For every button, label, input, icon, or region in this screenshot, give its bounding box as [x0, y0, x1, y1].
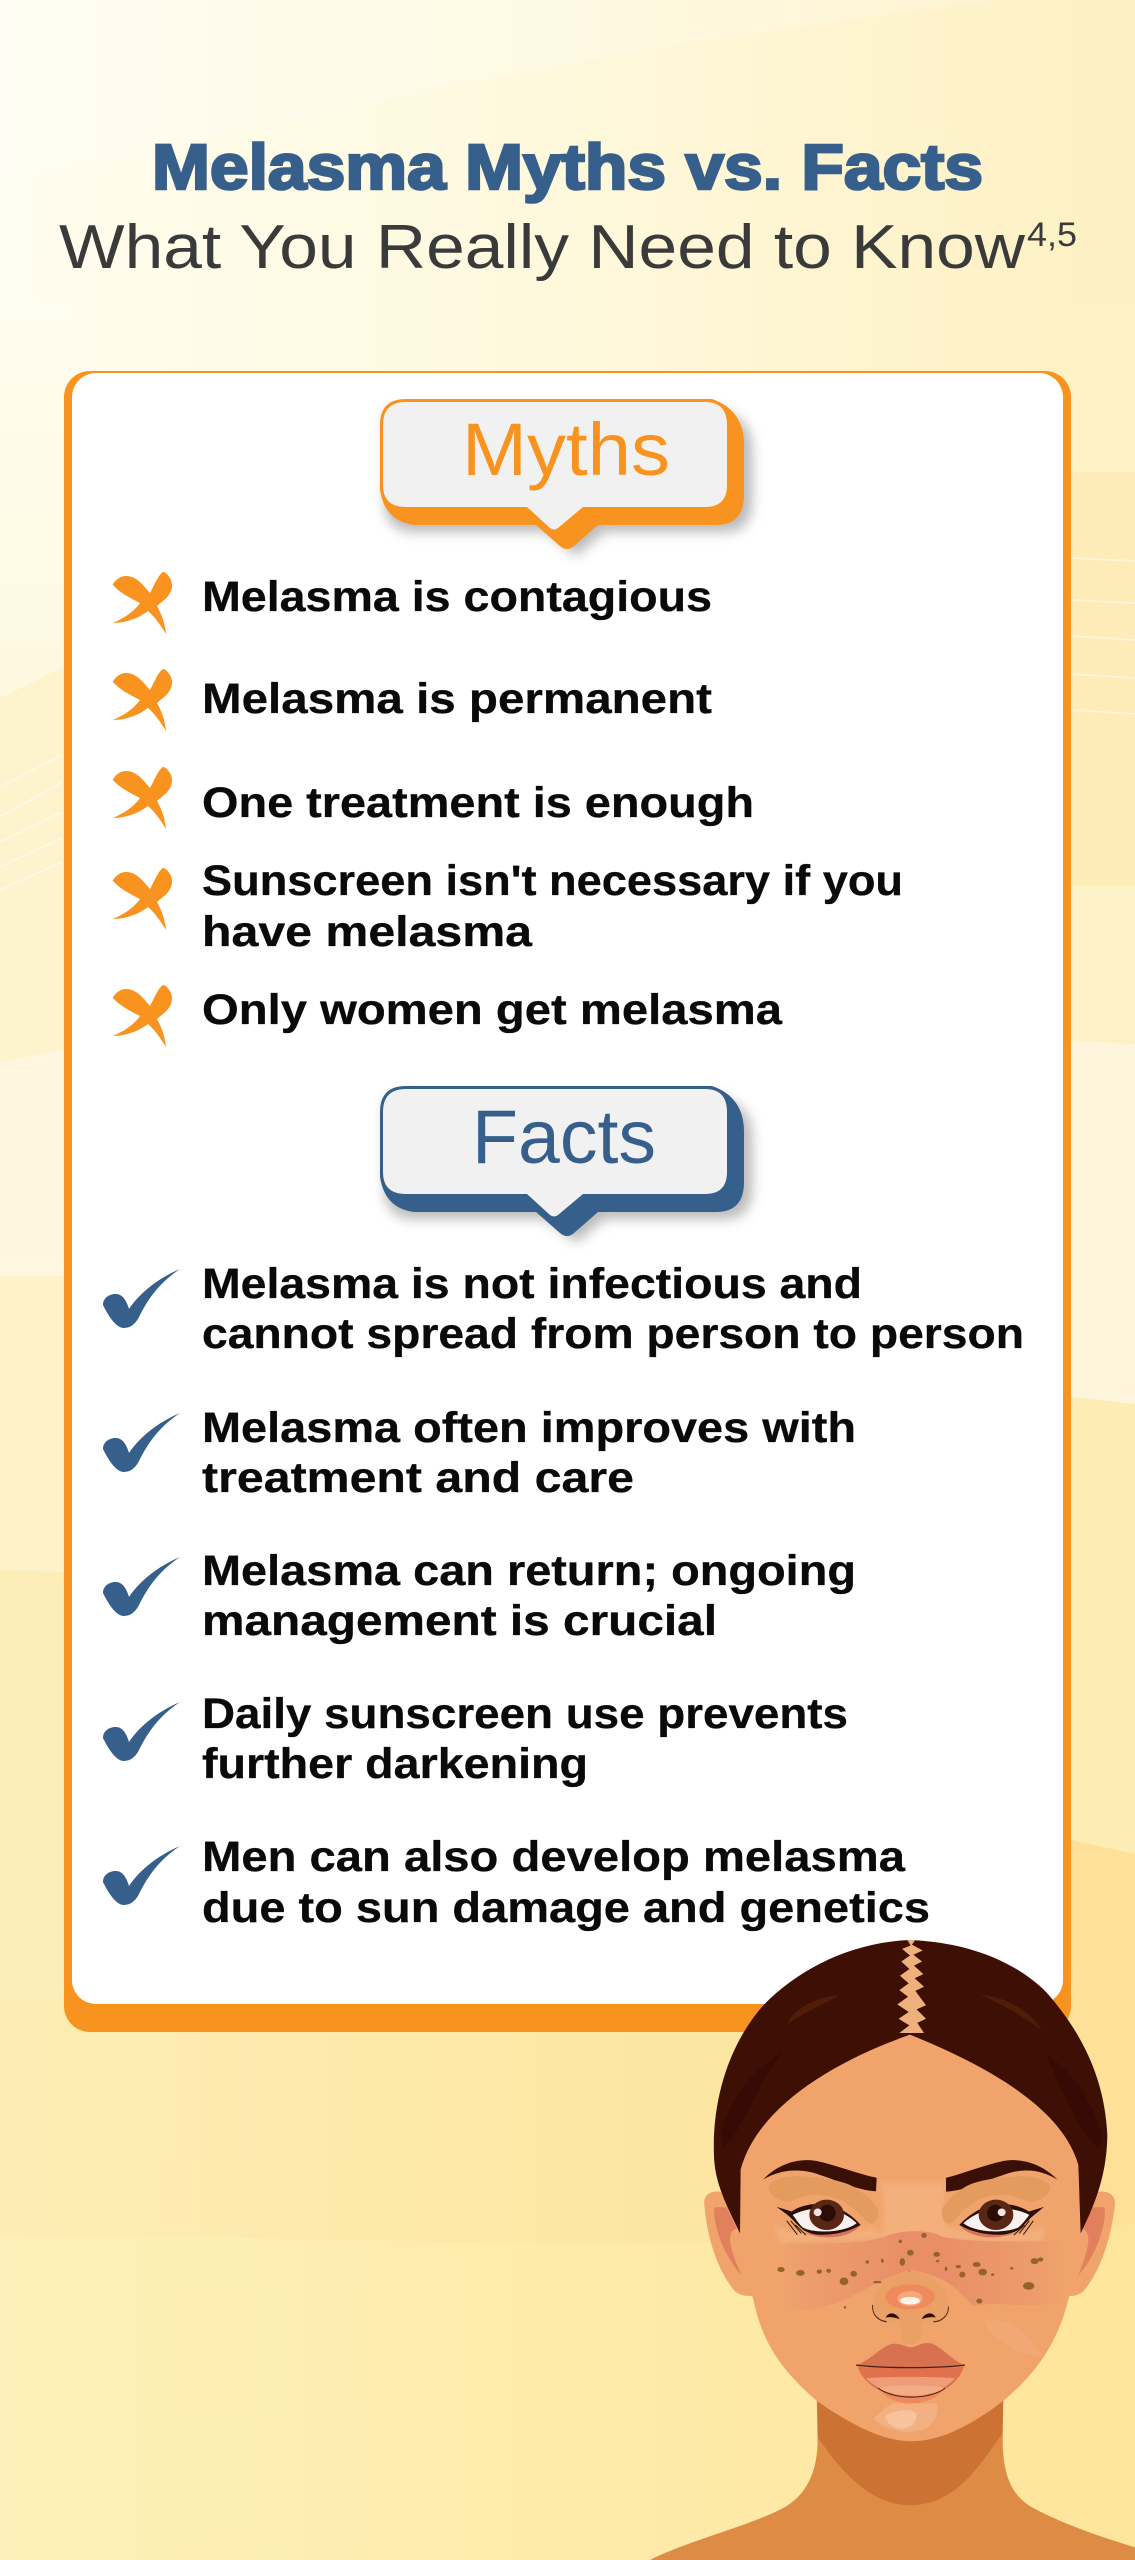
ears: [704, 2192, 1115, 2296]
fact 4: Daily sunscreen use prevents: [202, 1690, 848, 1738]
myth 3: One treatment is enough: [202, 779, 754, 827]
fact 1: cannot spread from person to person: [202, 1310, 1024, 1358]
fact 3: Melasma can return; ongoing: [202, 1547, 856, 1595]
face: [740, 2026, 1079, 2441]
myth 2: [113, 669, 712, 731]
fact 5: Men can also develop melasma: [202, 1833, 906, 1881]
freckles: [777, 2233, 1043, 2309]
fact 2: Melasma often improves with: [202, 1404, 856, 1452]
facts speech bubble: Facts: [472, 1095, 656, 1180]
myth 5: Only women get melasma: [202, 986, 783, 1034]
title: 4,5: [1027, 216, 1077, 254]
myth 4: Sunscreen isn't necessary if you: [202, 857, 903, 905]
hair: [714, 1940, 1107, 2233]
fact 1: Melasma is not infectious and: [202, 1260, 862, 1308]
myth 5: [113, 985, 783, 1047]
myths speech bubble: [380, 399, 752, 556]
title: What You Really Need to Know: [59, 213, 1025, 282]
fact 4: further darkening: [202, 1740, 588, 1788]
myth 4: [113, 857, 903, 956]
myth 1: [113, 572, 712, 634]
myth 3: [113, 767, 754, 829]
panel: myths and facts card: [64, 371, 1071, 2032]
neck and shoulders: [650, 2397, 1135, 2560]
right eye: [959, 2200, 1044, 2237]
facts speech bubble: [380, 1086, 752, 1243]
fact 3: [103, 1547, 856, 1645]
illustration: woman's face with melasma: [650, 1940, 1135, 2560]
myth 2: Melasma is permanent: [202, 675, 712, 723]
title: [59, 131, 1077, 282]
fact 2: [103, 1404, 856, 1502]
myth 4: have melasma: [202, 908, 533, 956]
fact 5: [103, 1833, 930, 1932]
lips: [856, 2343, 965, 2403]
left eye: [777, 2200, 861, 2237]
myths speech bubble: Myths: [462, 408, 670, 491]
fact 5: due to sun damage and genetics: [202, 1884, 930, 1932]
eyebrows: [763, 2160, 1057, 2192]
fact 4: [103, 1690, 848, 1788]
myth 1: Melasma is contagious: [202, 573, 712, 621]
melasma patches: [773, 2183, 1070, 2432]
nose: [873, 2271, 948, 2344]
eye shadow: [768, 2176, 1051, 2224]
fact 2: treatment and care: [202, 1454, 634, 1502]
fact 3: management is crucial: [202, 1597, 717, 1645]
fact 1: [103, 1260, 1024, 1358]
title: Melasma Myths vs. Facts: [152, 131, 983, 203]
